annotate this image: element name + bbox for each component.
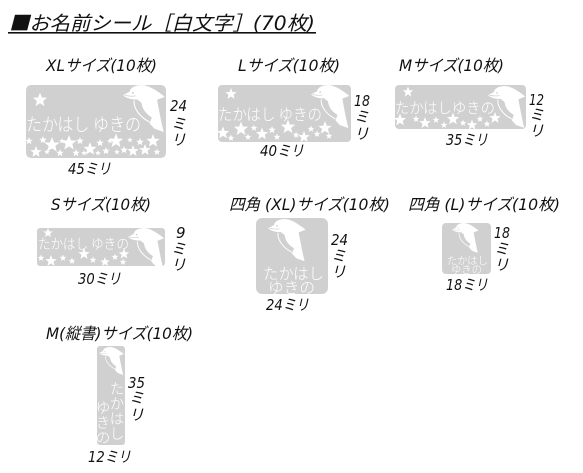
dimension: height: リ (529, 122, 544, 140)
heading: L: Lサイズ(10枚) (238, 56, 340, 75)
dimension: width: 18ミリ (446, 276, 488, 294)
dimension: height: ミ (331, 247, 346, 265)
dimension: height (171, 224, 186, 274)
panel: square L size (408, 195, 560, 294)
sticker: S (37, 228, 165, 269)
dimension: height (170, 97, 187, 149)
sticker: M vertical: か (110, 393, 124, 414)
panel: L size (217, 56, 370, 160)
sticker: M vertical (96, 346, 125, 448)
sticker: square XL (256, 218, 328, 298)
dimension: height: 18 (494, 224, 510, 242)
dimension: height: 24 (331, 231, 348, 249)
dimension: height (354, 92, 370, 143)
panel: XL size (25, 56, 187, 178)
dimension: width: 30ミリ (78, 270, 121, 288)
sticker: M (394, 85, 526, 129)
sticker: XL: たかはし ゆきの (26, 111, 141, 137)
sticker: M: たかはしゆきの (395, 97, 495, 118)
sticker: L: たかはし ゆきの (218, 101, 322, 125)
sticker: square L: ゆきの (451, 262, 482, 277)
sticker: XL (25, 85, 166, 158)
dimension: height: ミ (354, 108, 369, 126)
dimension: height: リ (494, 256, 509, 274)
sticker: M vertical: き (96, 412, 110, 433)
dimension: height (529, 91, 544, 140)
panel: square XL size (229, 195, 390, 314)
title: ■お名前シール［白文字］(70枚) (9, 7, 315, 36)
sticker: square XL: ゆきの (268, 276, 315, 298)
dimension: width: 24ミリ (266, 296, 309, 314)
dimension: height: リ (129, 406, 144, 424)
dimension: height: 18 (354, 92, 370, 110)
dimension: width: 35ミリ (446, 131, 488, 149)
sticker: square L (442, 223, 491, 277)
panel: M size (394, 56, 544, 149)
heading: M: Mサイズ(10枚) (399, 56, 504, 75)
sticker: M vertical: ゆ (96, 397, 110, 418)
dimension: height: リ (354, 125, 369, 143)
dimension: height: リ (171, 131, 186, 149)
dimension: height: ミ (171, 240, 186, 258)
dimension: height: ミ (529, 106, 544, 124)
dimension: width: 45ミリ (68, 160, 111, 178)
heading: XL: XLサイズ(10枚) (45, 56, 157, 75)
heading: square L: 四角 (L)サイズ(10枚) (408, 195, 560, 214)
sticker: L (217, 85, 351, 142)
dimension: height (331, 231, 348, 281)
sticker: M vertical: の (96, 427, 110, 448)
dimension: height: 9 (176, 224, 186, 242)
panel: M vertical size (46, 324, 193, 466)
heading: square XL: 四角 (XL)サイズ(10枚) (229, 195, 390, 214)
dimension: height: リ (171, 256, 186, 274)
heading: M vertical: M(縦書)サイズ(10枚) (46, 324, 193, 343)
panel: S size (37, 195, 186, 288)
heading: S: Sサイズ(10枚) (51, 195, 151, 214)
sticker: M vertical: し (110, 423, 124, 444)
sticker: M vertical: は (110, 408, 124, 429)
dimension: width: 12ミリ (88, 448, 131, 466)
dimension: height: 12 (529, 91, 544, 109)
dimension: height: ミ (171, 115, 186, 133)
dimension: width: 40ミリ (260, 142, 304, 160)
sticker: S: たかはし ゆきの (38, 234, 129, 254)
dimension: height: 35 (128, 374, 145, 392)
sticker: M vertical: た (110, 378, 124, 399)
dimension: height: ミ (494, 240, 509, 258)
dimension: height (494, 224, 510, 274)
dimension: height: 24 (170, 97, 187, 115)
dimension: height: リ (331, 263, 346, 281)
sticker: square L: たかはし (447, 253, 488, 268)
dimension: height: ミ (129, 389, 144, 407)
dimension: height (128, 374, 145, 424)
sticker: square XL: たかはし (263, 262, 324, 284)
